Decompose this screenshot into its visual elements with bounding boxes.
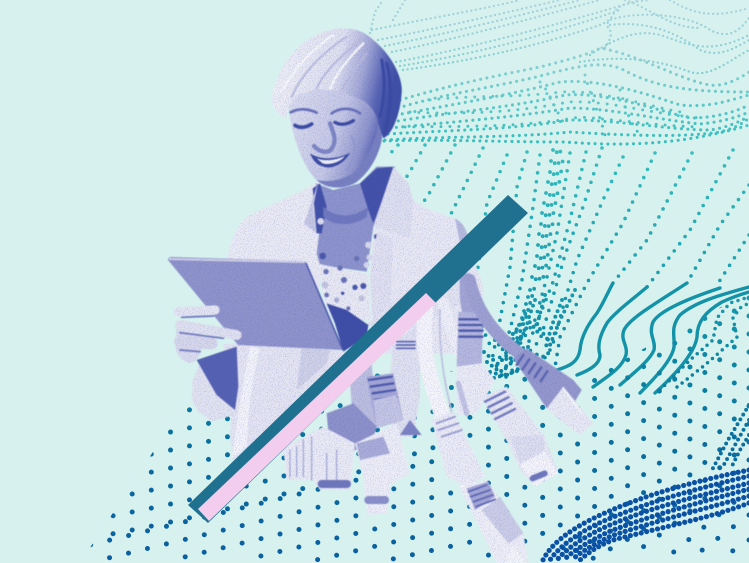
shirt upper right — [370, 167, 483, 353]
sleeve — [192, 363, 237, 422]
dense column near right edge — [712, 405, 749, 470]
blouse — [317, 263, 371, 320]
dotted fan lines — [388, 145, 749, 378]
back plug cluster — [283, 327, 422, 490]
hair — [272, 28, 402, 138]
shirt upper left — [227, 182, 320, 320]
network cables — [283, 280, 593, 563]
right lower plug — [482, 387, 558, 487]
person: woman — [227, 28, 483, 353]
shirt collar and placket — [373, 167, 413, 238]
dense dots at cable convergence — [484, 290, 575, 378]
diagonal bar: pink — [198, 293, 436, 521]
neck and chest — [316, 167, 395, 272]
left hand — [175, 310, 237, 363]
top plug — [467, 280, 469, 312]
right hand — [327, 303, 368, 352]
front middle plug — [355, 373, 410, 515]
eyebrows and eyes — [291, 109, 360, 170]
neck shadow — [313, 167, 395, 233]
forearm shadow — [197, 347, 238, 410]
person, tablet and cables cut-out — [168, 28, 593, 563]
blouse beads and necklace — [317, 218, 379, 310]
body under tablet — [223, 343, 350, 462]
hair strands — [282, 35, 390, 133]
diagonal bar: teal — [188, 195, 528, 523]
left lower plug — [432, 412, 528, 563]
tablet — [168, 257, 343, 350]
dense central squiggle column — [502, 150, 564, 360]
dot field: lower rows — [90, 296, 749, 562]
curved cable to right plug — [469, 280, 522, 355]
dotted wave: middle band jitter — [405, 75, 700, 135]
dense blue wave band — [543, 470, 749, 560]
dotted wave: top band — [370, 0, 749, 73]
white cable long — [424, 310, 468, 485]
lower body — [192, 273, 470, 462]
smile — [310, 153, 350, 168]
shirt sleeve right of bar — [367, 273, 470, 340]
dotted wave: middle band — [384, 48, 749, 144]
face — [288, 87, 382, 188]
face shading — [317, 123, 383, 187]
dotted to solid wavy lines — [557, 283, 749, 393]
